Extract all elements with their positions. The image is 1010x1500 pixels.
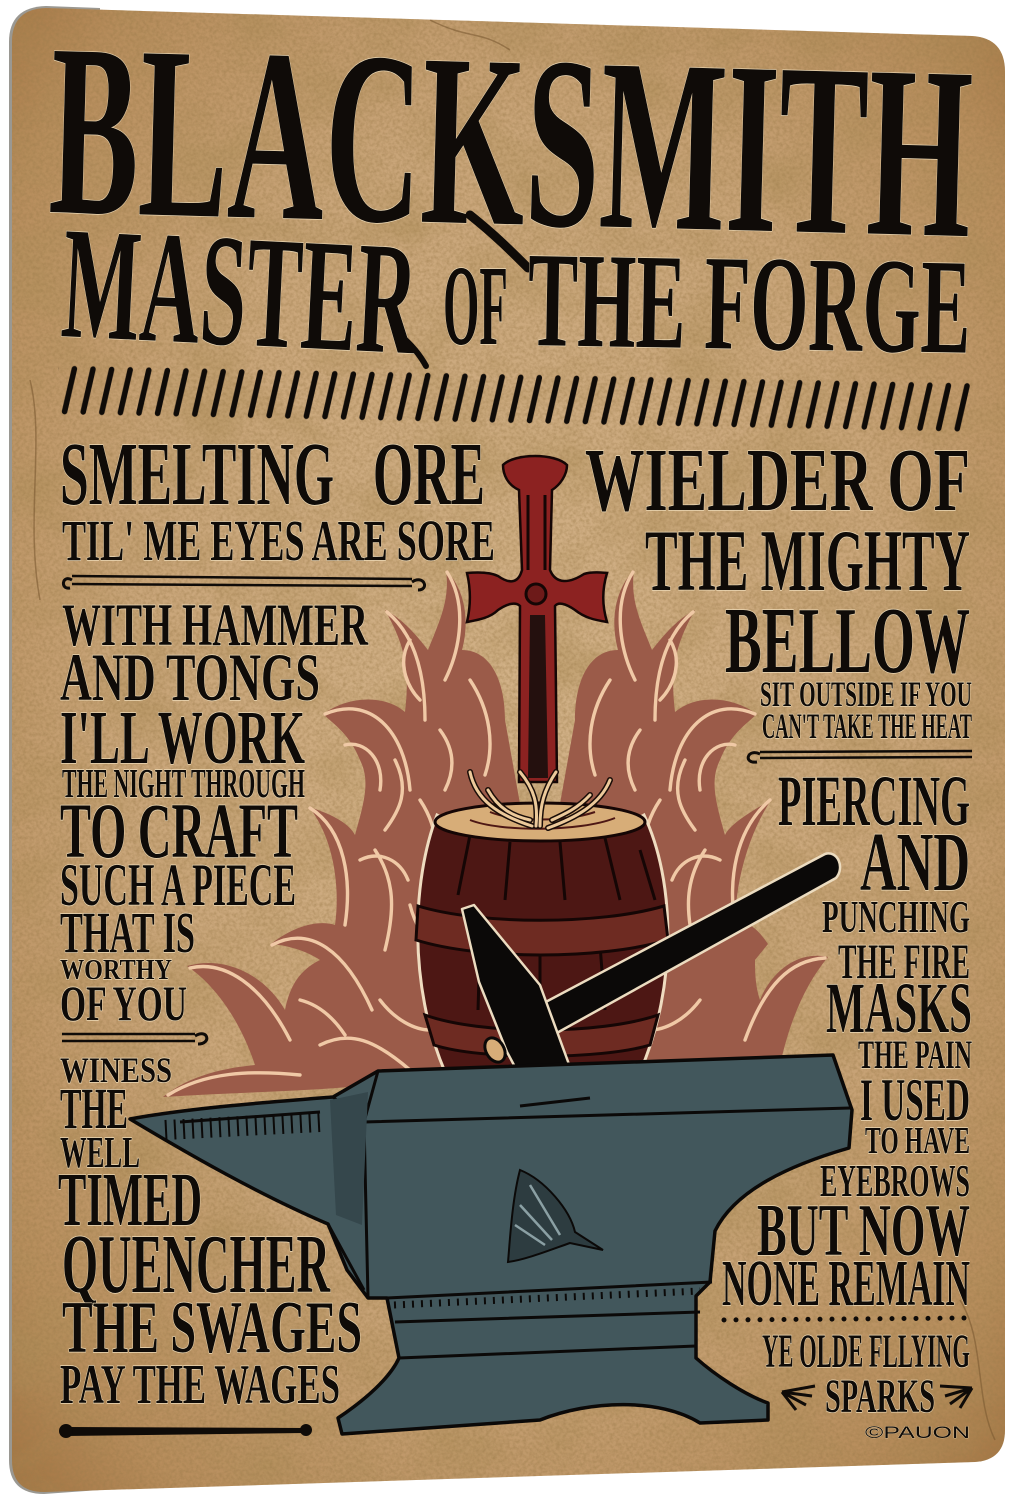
R swash tail [400,335,426,366]
line: the swages: THE SWAGES [62,1287,362,1369]
illustration: sword [467,456,607,782]
line: of you: OF YOU [60,975,187,1031]
icon: left spark arrow [782,1386,815,1410]
left column text [58,425,495,1438]
K swash tail [470,215,528,268]
dotted divider [724,1318,970,1320]
line: winess: WINESS [60,1050,172,1090]
line: such a piece: SUCH A PIECE [60,852,296,918]
illustration: straw around sword base [470,772,610,828]
hatched divider [58,365,970,432]
icon: right spark arrow [940,1386,972,1408]
illustration: hammer [462,853,840,1097]
illustration: flames [163,570,845,1097]
line: worthy: WORTHY [60,954,172,986]
line: that is: THAT IS [60,900,195,965]
subtitle: Master of the Forge: OF [443,242,508,369]
copyright mark: ©PAUON [865,1423,970,1442]
ornament divider [748,751,972,762]
bottom bar ornament [59,1424,312,1438]
right flame [558,570,845,1097]
ornament divider [63,576,425,590]
right column text [585,431,972,1442]
subtitle: Master of the Forge: MASTER [58,193,422,388]
line: timed: TIMED [58,1158,202,1242]
line: and tongs: AND TONGS [60,639,320,715]
line: til me eyes are sore: TIL' ME EYES ARE SORE [62,508,495,573]
line: well: WELL [60,1128,140,1177]
illustration: anvil [130,1055,852,1434]
line: sparks: SPARKS [825,1370,935,1423]
ornament divider [62,1034,207,1044]
line: pay the wages: PAY THE WAGES [60,1354,340,1416]
line: the: THE [60,1076,128,1141]
line: the night through: THE NIGHT THROUGH [62,760,305,806]
line: I'll work: I'LL WORK [60,696,305,780]
line: quencher: QUENCHER [62,1218,331,1311]
left flame [163,570,522,1097]
line: to craft: TO CRAFT [60,787,298,874]
line: with hammer: WITH HAMMER [62,592,368,658]
illustration: barrel [416,803,668,1072]
heading: smelting ore: SMELTING ORE [60,425,485,524]
